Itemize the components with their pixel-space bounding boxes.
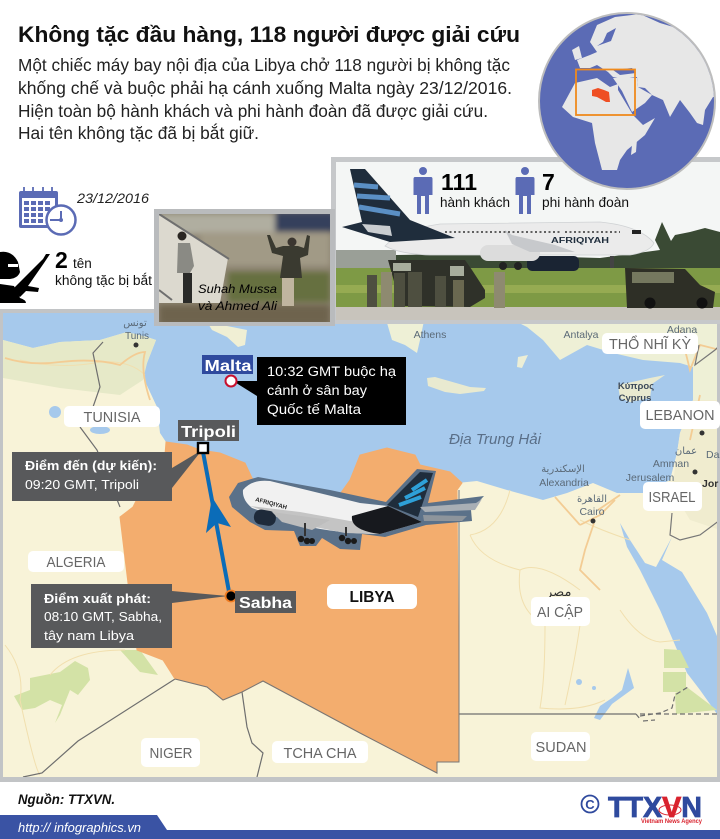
- photo: two hijackers: [154, 209, 335, 326]
- icon: person: [414, 167, 432, 214]
- intro text: Hiện toàn bộ hành khách và phi hành đoàn đã được giải cứu.: [18, 101, 488, 121]
- country labels: THỔ NHĨ KỲ: [609, 335, 691, 353]
- callout: Sabha departure: Điểm xuất phát:: [44, 591, 151, 606]
- Britain: [572, 46, 582, 60]
- callout: Sabha departure: [31, 584, 296, 648]
- Arabia and Anatolia: [613, 78, 652, 112]
- footer band: http:// infographics.vn: [18, 820, 141, 835]
- footer band: [0, 815, 720, 839]
- place names on map: Tunis: [125, 331, 149, 342]
- callout: Malta landing: Malta: [204, 358, 252, 375]
- intro text: [18, 55, 512, 143]
- Libya highlight: [592, 88, 610, 102]
- province lines and roads: [5, 360, 680, 775]
- intro text: Hai tên không tặc đã bị bắt giữ.: [18, 122, 259, 143]
- place names on map: Jor: [702, 478, 718, 490]
- green areas: [664, 649, 689, 668]
- flight route arrow: [203, 452, 231, 597]
- logo: TTXVN: Vietnam News Agency: [641, 818, 702, 825]
- callout: Tripoli destination: [12, 420, 239, 501]
- figures: [178, 232, 186, 240]
- icon: armed hijacker: [0, 252, 50, 303]
- passenger stat: 111: [441, 169, 477, 195]
- country labels: ISRAEL: [648, 489, 696, 506]
- photo: two hijackers: và Ahmed Ali: [198, 299, 277, 313]
- callout: Sabha departure: 08:10 GMT, Sabha,: [44, 609, 162, 624]
- place names on map: Alexandria: [539, 477, 589, 489]
- hijacker count: [55, 247, 152, 288]
- place names on map: Adana: [667, 324, 697, 336]
- Eurasia: [577, 14, 720, 125]
- Libya territory: [120, 442, 462, 773]
- icon: person: [516, 167, 534, 214]
- passenger stat: [414, 167, 510, 214]
- borders: [23, 342, 720, 777]
- callout: Malta landing: [202, 355, 406, 425]
- passenger stat: hành khách: [440, 194, 510, 210]
- callout: Malta landing: 10:32 GMT buộc hạ: [267, 364, 397, 379]
- Malta marker: [226, 376, 236, 386]
- place names on map: مصر: [545, 584, 571, 600]
- land: Egypt, Levant, Sudan: [440, 400, 720, 780]
- place names on map: Cairo: [579, 506, 605, 518]
- logo: TTXVN: TTXVN: [608, 792, 702, 824]
- place names on map: Jerusalem: [626, 472, 674, 484]
- place names on map: Cyprus: [619, 393, 651, 404]
- country labels: [28, 333, 720, 767]
- Sabha marker: [226, 590, 236, 602]
- place names on map: Κύπρος: [618, 381, 654, 392]
- hijacker count: 2: [55, 247, 68, 273]
- photo: airplane and soldiers: AFRIQIYAH: [551, 236, 609, 245]
- place names on map: الإسكندرية: [541, 464, 585, 475]
- country labels: LEBANON: [646, 407, 714, 424]
- hijacker count: không tặc bị bắt: [55, 273, 152, 288]
- photo: two hijackers: Suhah Mussa: [198, 282, 277, 296]
- location frame: [576, 70, 635, 115]
- sea label: Địa Trung Hải: [449, 431, 542, 448]
- country labels: LIBYA: [350, 589, 394, 606]
- callout: Malta landing: cánh ở sân bay: [267, 383, 367, 398]
- land: north Africa west: [3, 332, 460, 780]
- place names on map: Amman: [653, 458, 689, 470]
- crew stat: 7: [542, 169, 555, 195]
- Tripoli marker: [198, 443, 208, 453]
- logo: TTXVN: C: [585, 797, 595, 812]
- country labels: TUNISIA: [84, 409, 140, 426]
- Madagascar: [631, 142, 637, 155]
- hijacker count: tên: [73, 256, 92, 271]
- crew stat: [516, 167, 629, 214]
- intro text: Một chiếc máy bay nội địa của Libya chở 118 người bị không tặc: [18, 55, 510, 75]
- place names on map: [123, 318, 720, 600]
- callout: Tripoli destination: Tripoli: [181, 424, 236, 441]
- callout: Tripoli destination: Điểm đến (dự kiến):: [25, 458, 157, 473]
- country labels: AI CẬP: [537, 604, 583, 621]
- country labels: NIGER: [150, 745, 193, 762]
- photo: airplane and soldiers: [331, 157, 720, 324]
- Baltic and Black Sea: [597, 28, 616, 46]
- airplane illustration on map: AFRIQIYAH: [254, 497, 287, 511]
- place names on map: Da: [706, 449, 720, 461]
- place names on map: Athens: [414, 329, 446, 341]
- map panel: [0, 309, 720, 782]
- globe locator map: [539, 13, 720, 189]
- crew stat: phi hành đoàn: [542, 194, 629, 210]
- date: 23/12/2016: [76, 190, 149, 206]
- country labels: SUDAN: [536, 739, 586, 756]
- callout: Malta landing: Quốc tế Malta: [267, 402, 362, 417]
- callout: Sabha departure: Sabha: [239, 595, 292, 612]
- callout: Sabha departure: tây nam Libya: [44, 628, 135, 643]
- intro text: khống chế và buộc phải hạ cánh xuống Malta ngày 23/12/2016.: [18, 78, 512, 98]
- airliner: [385, 222, 654, 255]
- tree line: [396, 222, 720, 268]
- title: Không tặc đầu hàng, 118 người được giải cứu: [18, 22, 520, 47]
- Nile lakes: [594, 668, 634, 720]
- place names on map: Antalya: [563, 329, 599, 341]
- jeeps and soldiers: [388, 260, 485, 307]
- Red Sea: [620, 523, 720, 716]
- land: Greece and Turkey: [387, 324, 424, 353]
- country labels: TCHA CHA: [284, 745, 356, 762]
- place names on map: عمان: [675, 446, 697, 457]
- airplane illustration on map: [229, 469, 484, 550]
- land: Sicily and islands: [210, 326, 247, 347]
- source: Nguồn: TTXVN.: [18, 792, 115, 807]
- Africa: [562, 78, 655, 170]
- place names on map: القاهرة: [577, 494, 607, 505]
- country labels: ALGERIA: [46, 554, 106, 571]
- callout: Tripoli destination: 09:20 GMT, Tripoli: [25, 477, 139, 492]
- icon: calendar and clock: [19, 187, 76, 234]
- place names on map: تونس: [123, 318, 147, 329]
